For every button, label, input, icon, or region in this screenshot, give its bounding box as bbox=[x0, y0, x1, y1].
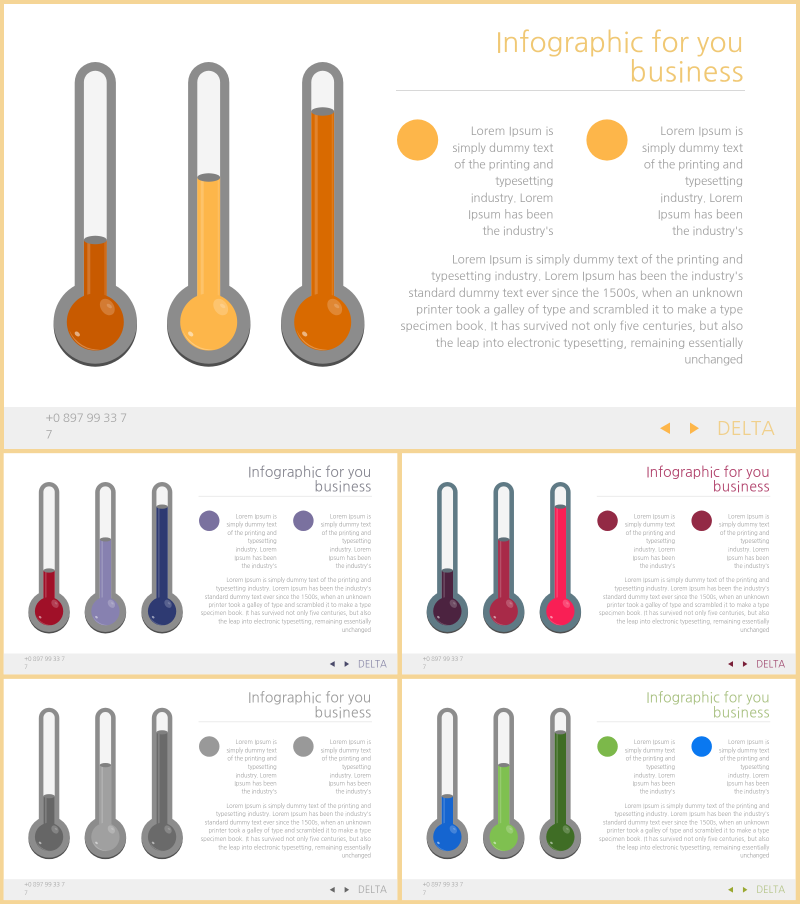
text block: column 1: simply dummy text bbox=[625, 747, 676, 753]
phone number: +0 897 99 33 7 bbox=[46, 412, 127, 424]
icon: right arrow bbox=[743, 887, 747, 893]
text block: column 1: simply dummy text bbox=[452, 142, 554, 154]
title: business bbox=[713, 705, 770, 720]
text block: column 1: Lorem Ipsum is bbox=[236, 513, 277, 519]
thermometer: low level bbox=[54, 62, 137, 367]
panel: crimson slide bbox=[402, 453, 796, 674]
text block: paragraph: standard dummy text ever since the 1500s, when an unknown bbox=[205, 594, 371, 600]
text block: paragraph: standard dummy text ever since the 1500s, when an unknown bbox=[603, 594, 770, 600]
text block: column 1: typesetting bbox=[646, 764, 675, 770]
title: business bbox=[713, 480, 770, 495]
panel: grey slide bbox=[4, 679, 397, 900]
icon: left arrow bbox=[728, 661, 733, 667]
text block: column 1: Ipsum has been bbox=[234, 555, 277, 561]
text block: column 2: industry. Lorem bbox=[330, 772, 371, 778]
text block: paragraph bbox=[201, 577, 371, 633]
phone number bbox=[24, 882, 65, 896]
text block: column 2: of the printing and bbox=[720, 530, 770, 536]
text block: column 2: typesetting bbox=[740, 538, 770, 544]
phone number bbox=[423, 882, 464, 896]
text block: column 2: of the printing and bbox=[644, 158, 743, 170]
text block: paragraph: the leap into electronic typesetting, remaining essentially bbox=[436, 337, 744, 349]
text block: paragraph: printer took a galley of type and scrambled it to make a type bbox=[208, 602, 371, 608]
title bbox=[646, 465, 770, 495]
text block: paragraph bbox=[201, 803, 371, 859]
text block: column 1: typesetting bbox=[646, 538, 675, 544]
text block: column 2: Ipsum has been bbox=[658, 208, 743, 220]
panel: main orange slide bbox=[4, 4, 796, 449]
thermometer: medium level bbox=[483, 708, 524, 859]
title rule bbox=[199, 721, 372, 723]
text block: paragraph: unchanged bbox=[342, 627, 371, 633]
text block: column 1: the industry's bbox=[241, 789, 277, 795]
text block: column 1: the industry's bbox=[482, 225, 553, 237]
text block: paragraph bbox=[400, 254, 744, 366]
text block: paragraph: specimen book. It has survived not only five centuries, but also bbox=[201, 836, 371, 842]
brand label: DELTA bbox=[756, 660, 785, 669]
title: Infographic for you bbox=[248, 691, 371, 706]
brand label: DELTA bbox=[358, 886, 387, 895]
thermometer: medium level bbox=[167, 62, 250, 367]
phone number: +0 897 99 33 7 bbox=[423, 882, 464, 888]
icon: circle bullet 2 bbox=[293, 736, 314, 757]
thermometer: high level bbox=[540, 708, 581, 859]
footer band bbox=[4, 879, 397, 900]
text block: column 1 bbox=[625, 513, 676, 569]
thermometer: medium level bbox=[85, 482, 126, 633]
text block: column 1: typesetting bbox=[248, 764, 277, 770]
thermometer: medium level bbox=[483, 482, 524, 633]
text block: column 2: simply dummy text bbox=[321, 522, 372, 528]
text block: column 1: Lorem Ipsum is bbox=[634, 513, 676, 519]
text block: paragraph: the leap into electronic typesetting, remaining essentially bbox=[218, 619, 371, 625]
thermometer: low level bbox=[28, 482, 70, 633]
text block: column 2: Ipsum has been bbox=[727, 555, 770, 561]
icon: right arrow bbox=[345, 887, 349, 893]
icon: circle bullet 1 bbox=[597, 511, 618, 531]
text block: column 2: Ipsum has been bbox=[329, 780, 371, 786]
icon: circle bullet 2 bbox=[691, 511, 712, 531]
text block: column 1: the industry's bbox=[640, 563, 676, 569]
title: business bbox=[630, 58, 744, 86]
text block: column 2: simply dummy text bbox=[321, 747, 372, 753]
text block: paragraph: printer took a galley of type and scrambled it to make a type bbox=[607, 828, 769, 834]
text block: column 2 bbox=[321, 513, 372, 569]
text block: column 2: Lorem Ipsum is bbox=[660, 125, 743, 137]
text block: column 1: the industry's bbox=[640, 789, 676, 795]
text block: column 2 bbox=[719, 513, 770, 569]
text block: paragraph: printer took a galley of type and scrambled it to make a type bbox=[607, 602, 769, 608]
thermometer: medium level bbox=[85, 708, 126, 859]
text block: paragraph: Lorem Ipsum is simply dummy text of the printing and bbox=[226, 803, 371, 809]
text block: column 2: Lorem Ipsum is bbox=[728, 513, 770, 519]
text block: column 1: of the printing and bbox=[454, 158, 553, 170]
text block: column 1: the industry's bbox=[241, 563, 277, 569]
footer band bbox=[4, 653, 397, 674]
text block: column 2: the industry's bbox=[734, 789, 770, 795]
phone number: 7 bbox=[423, 664, 427, 670]
phone number: 7 bbox=[46, 428, 53, 440]
text block: paragraph: the leap into electronic typesetting, remaining essentially bbox=[616, 844, 770, 850]
footer band bbox=[4, 407, 796, 449]
text block: paragraph: typesetting industry. Lorem Ipsum has been the industry's bbox=[614, 811, 770, 817]
text block: column 2: the industry's bbox=[672, 225, 743, 237]
title rule bbox=[597, 495, 770, 497]
brand label: DELTA bbox=[358, 660, 387, 669]
phone number: 7 bbox=[423, 890, 427, 896]
text block: paragraph: typesetting industry. Lorem Ipsum has been the industry's bbox=[216, 811, 371, 817]
text block: column 1 bbox=[452, 125, 554, 237]
text block: paragraph: unchanged bbox=[740, 853, 770, 859]
text block: paragraph: printer took a galley of type and scrambled it to make a type bbox=[208, 828, 371, 834]
text block: paragraph bbox=[599, 577, 770, 633]
text block: column 1 bbox=[227, 739, 278, 795]
text block: column 1: of the printing and bbox=[227, 756, 277, 762]
text block: column 2: typesetting bbox=[685, 175, 743, 187]
phone number: 7 bbox=[24, 890, 28, 896]
icon: circle bullet 1 bbox=[397, 119, 438, 161]
phone number: +0 897 99 33 7 bbox=[423, 656, 464, 662]
text block: column 1 bbox=[227, 513, 278, 569]
title bbox=[248, 691, 371, 720]
text block: column 2: typesetting bbox=[342, 538, 371, 544]
text block: column 2: industry. Lorem bbox=[728, 547, 769, 553]
text block: paragraph: unchanged bbox=[684, 354, 743, 366]
text block: column 1 bbox=[625, 739, 676, 795]
text block: column 1: of the printing and bbox=[227, 530, 277, 536]
thermometer: high level bbox=[141, 482, 183, 633]
text block: column 2: industry. Lorem bbox=[660, 192, 743, 204]
text block: column 2: of the printing and bbox=[322, 756, 371, 762]
text block: column 2: the industry's bbox=[336, 563, 371, 569]
text block: column 2: industry. Lorem bbox=[728, 772, 769, 778]
text block: column 1: industry. Lorem bbox=[236, 772, 277, 778]
footer band bbox=[402, 879, 796, 900]
text block: column 2 bbox=[642, 125, 744, 237]
title rule bbox=[597, 721, 770, 723]
text block: column 1: industry. Lorem bbox=[634, 547, 675, 553]
icon: right arrow bbox=[743, 661, 747, 667]
icon: left arrow bbox=[330, 661, 335, 667]
icon: circle bullet 1 bbox=[597, 736, 618, 757]
text block: paragraph: Lorem Ipsum is simply dummy text of the printing and bbox=[625, 577, 770, 583]
text block: column 2: Lorem Ipsum is bbox=[728, 739, 770, 745]
icon: left arrow bbox=[660, 422, 670, 434]
phone number bbox=[423, 656, 464, 670]
text block: paragraph: specimen book. It has survived not only five centuries, but also bbox=[599, 836, 770, 842]
icon: circle bullet 2 bbox=[691, 736, 712, 757]
icon: left arrow bbox=[728, 887, 733, 893]
phone number: 7 bbox=[24, 664, 28, 670]
thermometer: high level bbox=[141, 708, 183, 859]
brand label: DELTA bbox=[717, 419, 775, 438]
text block: column 1: Ipsum has been bbox=[633, 780, 675, 786]
text block: column 1: simply dummy text bbox=[227, 522, 278, 528]
footer band bbox=[402, 653, 796, 674]
title: Infographic for you bbox=[248, 465, 371, 480]
title rule bbox=[199, 495, 372, 497]
phone number bbox=[24, 656, 65, 670]
text block: column 1: simply dummy text bbox=[227, 747, 278, 753]
text block: paragraph: printer took a galley of type and scrambled it to make a type bbox=[416, 304, 743, 316]
text block: column 1: Ipsum has been bbox=[633, 555, 675, 561]
text block: column 1: Ipsum has been bbox=[234, 780, 277, 786]
icon: right arrow bbox=[345, 661, 349, 667]
text block: column 1: simply dummy text bbox=[625, 522, 676, 528]
text block: column 2: of the printing and bbox=[322, 530, 371, 536]
text block: column 1: Lorem Ipsum is bbox=[634, 739, 676, 745]
icon: circle bullet 1 bbox=[199, 736, 219, 757]
text block: column 2: simply dummy text bbox=[719, 522, 770, 528]
text block: column 1: typesetting bbox=[248, 538, 277, 544]
text block: column 1: industry. Lorem bbox=[236, 547, 277, 553]
phone number: +0 897 99 33 7 bbox=[24, 882, 65, 888]
text block: paragraph bbox=[599, 803, 770, 859]
text block: column 2: the industry's bbox=[734, 563, 770, 569]
thermometer: low level bbox=[427, 708, 468, 859]
text block: paragraph: standard dummy text ever since the 1500s, when an unknown bbox=[408, 287, 743, 299]
title bbox=[248, 465, 371, 495]
title: business bbox=[315, 705, 371, 720]
text block: column 1: industry. Lorem bbox=[471, 192, 553, 204]
text block: column 2: Ipsum has been bbox=[727, 780, 770, 786]
text block: paragraph: unchanged bbox=[740, 627, 770, 633]
text block: paragraph: Lorem Ipsum is simply dummy text of the printing and bbox=[452, 254, 743, 266]
text block: column 2: industry. Lorem bbox=[330, 547, 371, 553]
slide background bbox=[4, 679, 397, 900]
text block: column 2: of the printing and bbox=[720, 756, 770, 762]
title bbox=[646, 691, 770, 720]
thermometer: low level bbox=[28, 708, 70, 859]
title: Infographic for you bbox=[646, 691, 770, 706]
panel: green slide bbox=[402, 679, 796, 900]
text block: column 2: simply dummy text bbox=[719, 747, 770, 753]
text block: column 2: typesetting bbox=[342, 764, 371, 770]
title: Infographic for you bbox=[496, 29, 744, 57]
text block: paragraph: unchanged bbox=[342, 853, 371, 859]
text block: paragraph: specimen book. It has survived not only five centuries, but also bbox=[599, 610, 770, 616]
phone number: +0 897 99 33 7 bbox=[24, 656, 65, 662]
text block: paragraph: standard dummy text ever since the 1500s, when an unknown bbox=[205, 820, 371, 826]
text block: column 2: Lorem Ipsum is bbox=[330, 513, 371, 519]
phone number bbox=[46, 412, 127, 440]
text block: paragraph: the leap into electronic typesetting, remaining essentially bbox=[218, 844, 371, 850]
text block: paragraph: typesetting industry. Lorem Ipsum has been the industry's bbox=[216, 585, 371, 591]
text block: paragraph: typesetting industry. Lorem Ipsum has been the industry's bbox=[614, 585, 770, 591]
text block: paragraph: specimen book. It has survived not only five centuries, but also bbox=[400, 320, 743, 332]
icon: circle bullet 1 bbox=[199, 511, 219, 531]
text block: column 1: Lorem Ipsum is bbox=[471, 125, 553, 137]
brand label: DELTA bbox=[756, 886, 785, 895]
text block: column 2 bbox=[719, 739, 770, 795]
text block: column 2: the industry's bbox=[336, 789, 371, 795]
thermometer: low level bbox=[427, 482, 468, 633]
text block: paragraph: Lorem Ipsum is simply dummy text of the printing and bbox=[226, 577, 371, 583]
slide background bbox=[4, 4, 796, 449]
text block: paragraph: specimen book. It has survived not only five centuries, but also bbox=[201, 610, 371, 616]
text block: column 2 bbox=[321, 739, 372, 795]
text block: column 1: of the printing and bbox=[626, 530, 675, 536]
text block: paragraph: typesetting industry. Lorem Ipsum has been the industry's bbox=[431, 270, 743, 282]
text block: column 2: Ipsum has been bbox=[329, 555, 371, 561]
title bbox=[496, 29, 744, 86]
slide background bbox=[402, 679, 796, 900]
text block: column 1: of the printing and bbox=[626, 756, 675, 762]
text block: column 1: Ipsum has been bbox=[468, 208, 553, 220]
text block: column 1: Lorem Ipsum is bbox=[236, 739, 277, 745]
text block: paragraph: standard dummy text ever since the 1500s, when an unknown bbox=[603, 820, 770, 826]
thermometer: high level bbox=[540, 482, 581, 633]
icon: right arrow bbox=[690, 422, 699, 434]
slide background bbox=[4, 453, 397, 674]
text block: column 1: industry. Lorem bbox=[634, 772, 675, 778]
text block: column 1: typesetting bbox=[495, 175, 553, 187]
text block: column 2: typesetting bbox=[740, 764, 770, 770]
title rule bbox=[396, 90, 745, 91]
text block: column 2: Lorem Ipsum is bbox=[330, 739, 371, 745]
text block: paragraph: Lorem Ipsum is simply dummy text of the printing and bbox=[625, 803, 770, 809]
slide background bbox=[402, 453, 796, 674]
title: business bbox=[315, 480, 371, 495]
text block: column 2: simply dummy text bbox=[642, 142, 744, 154]
icon: circle bullet 2 bbox=[586, 119, 628, 161]
thermometer: high level bbox=[281, 62, 364, 367]
title: Infographic for you bbox=[646, 465, 770, 480]
text block: paragraph: the leap into electronic typesetting, remaining essentially bbox=[616, 619, 770, 625]
icon: left arrow bbox=[330, 887, 335, 893]
icon: circle bullet 2 bbox=[293, 511, 314, 531]
panel: purple slide bbox=[4, 453, 397, 674]
